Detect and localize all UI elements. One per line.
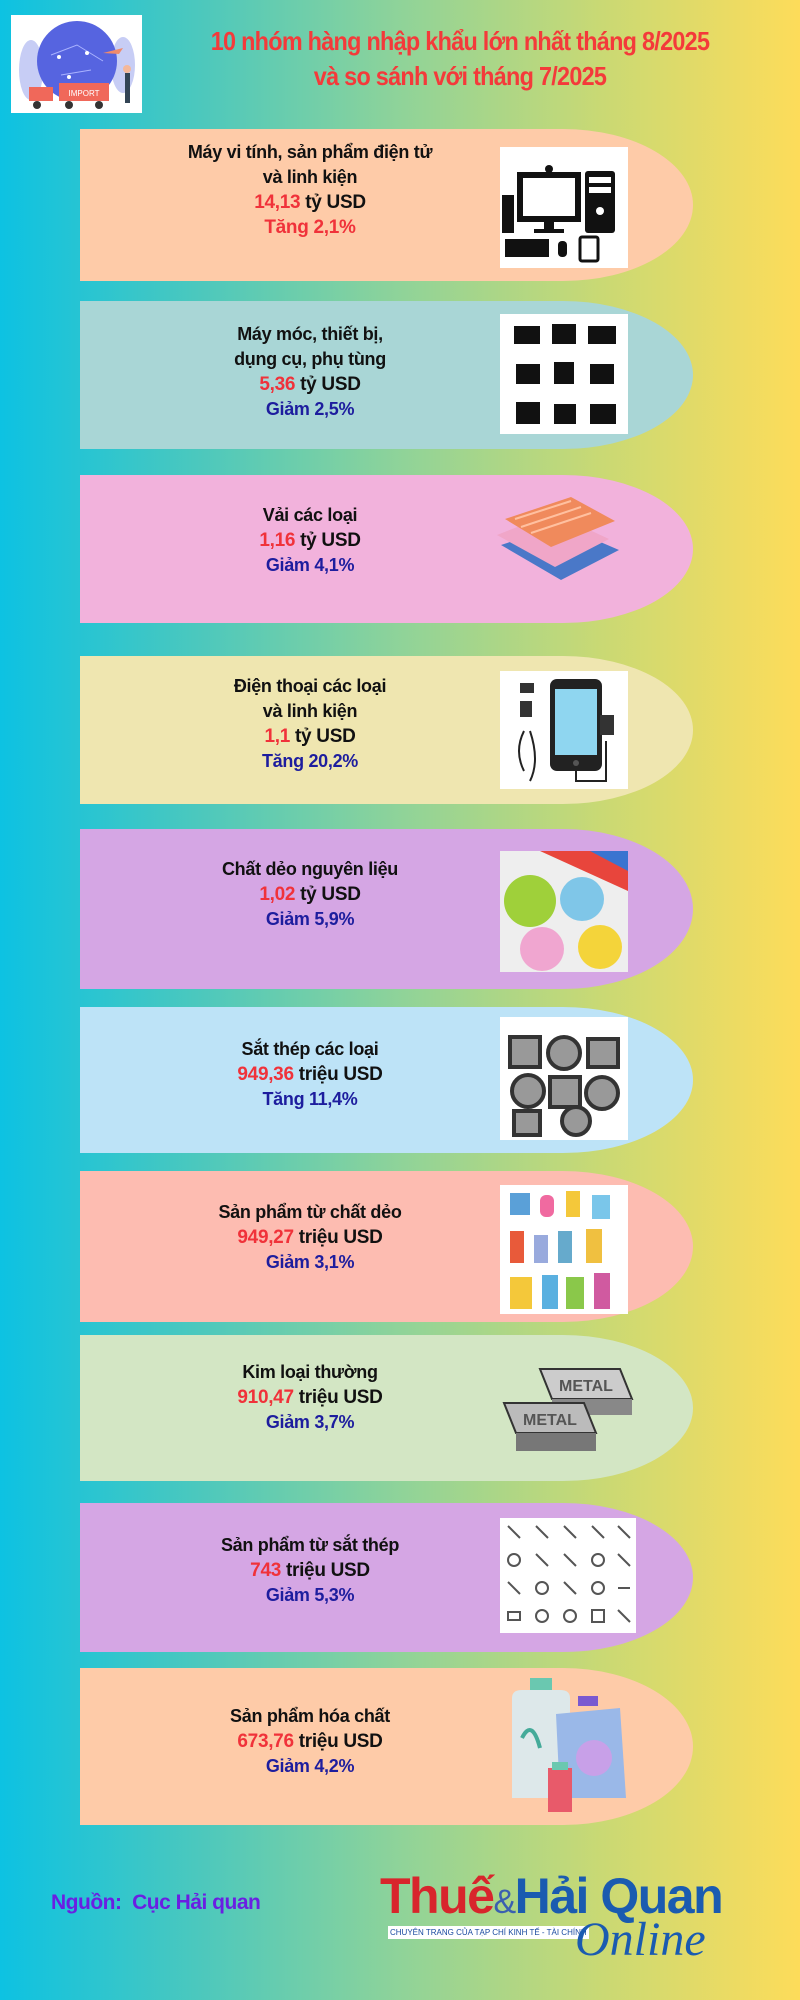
text: 14,13 tỷ USD — [254, 192, 366, 213]
panel 3: fabric — [80, 475, 693, 623]
icon: plastic pellets — [500, 851, 628, 972]
text: Điện thoại các loại — [234, 676, 386, 696]
text: 1,02 tỷ USD — [259, 884, 361, 905]
panel 4: phones — [80, 656, 693, 804]
text: Sản phẩm từ chất dẻo — [218, 1202, 402, 1222]
logo: Thuế & Hải Quan Online: Thuế&Hải Quan — [380, 1868, 722, 1924]
text: 949,36 triệu USD — [237, 1064, 383, 1085]
icon: steel parts grid — [500, 1518, 636, 1633]
text: Giảm 5,3% — [266, 1585, 354, 1605]
text: 743 triệu USD — [250, 1560, 370, 1581]
text: Vải các loại — [263, 505, 357, 525]
icon: metal ingots: METAL — [523, 1412, 577, 1429]
icon: phone — [500, 671, 628, 789]
panel 7: plastic products — [80, 1171, 693, 1322]
logo: import globe: IMPORT — [69, 89, 100, 98]
title: và so sánh với tháng 7/2025 — [314, 61, 606, 91]
icon: fabric — [498, 497, 619, 580]
icon: computer — [500, 147, 628, 268]
text: Giảm 2,5% — [266, 399, 354, 419]
text: Giảm 4,1% — [266, 555, 354, 575]
title: 10 nhóm hàng nhập khẩu lớn nhất tháng 8/2025 — [211, 26, 709, 56]
text: Sản phẩm từ sắt thép — [221, 1535, 399, 1555]
icon: metal ingots: METAL — [559, 1378, 613, 1395]
panel 9: steel products — [80, 1503, 693, 1652]
text: 673,76 triệu USD — [237, 1731, 383, 1752]
icon: bottles — [500, 1185, 628, 1314]
text: Giảm 5,9% — [266, 909, 354, 929]
panel 10: chemicals — [80, 1668, 693, 1825]
text: 1,1 tỷ USD — [264, 726, 356, 747]
panel 2: machinery — [80, 301, 693, 449]
source: Nguồn: Cục Hải quan — [51, 1891, 260, 1914]
text: 5,36 tỷ USD — [259, 374, 361, 395]
icon: metal ingots — [502, 1368, 634, 1451]
text: Sản phẩm hóa chất — [230, 1706, 390, 1726]
text: Tăng 20,2% — [262, 751, 358, 771]
text: Giảm 3,1% — [266, 1252, 354, 1272]
text: 910,47 triệu USD — [237, 1387, 383, 1408]
logo: Thuế & Hải Quan Online: Online — [575, 1913, 706, 1966]
text: 949,27 triệu USD — [237, 1227, 383, 1248]
text: Máy vi tính, sản phẩm điện tử — [188, 142, 432, 162]
icon: machines — [500, 314, 628, 434]
text: dụng cụ, phụ tùng — [234, 349, 386, 369]
logo: Thuế & Hải Quan Online — [380, 1868, 722, 1966]
text: Sắt thép các loại — [242, 1039, 378, 1059]
panel 6: steel — [80, 1007, 693, 1153]
text: Chất dẻo nguyên liệu — [222, 859, 398, 879]
icon: chemical containers — [512, 1678, 626, 1812]
title — [211, 26, 710, 91]
icon: steel pipes — [500, 1017, 628, 1140]
text: 1,16 tỷ USD — [259, 530, 361, 551]
panel 5: plastics — [80, 829, 693, 989]
text: Giảm 4,2% — [266, 1756, 354, 1776]
text: Tăng 2,1% — [264, 217, 356, 238]
panel 8: base metals — [80, 1335, 693, 1481]
logo: import globe — [11, 15, 142, 113]
panel 1: computers — [80, 129, 693, 281]
text: và linh kiện — [263, 701, 357, 721]
text: và linh kiện — [263, 167, 357, 187]
text: Máy móc, thiết bị, — [237, 324, 383, 344]
text: Giảm 3,7% — [266, 1412, 354, 1432]
text: Kim loại thường — [242, 1362, 378, 1382]
text: Tăng 11,4% — [262, 1089, 358, 1109]
logo: Thuế & Hải Quan Online: CHUYÊN TRANG CỦA TẠP CHÍ KINH TẾ - TÀI CHÍNH — [390, 1928, 587, 1937]
